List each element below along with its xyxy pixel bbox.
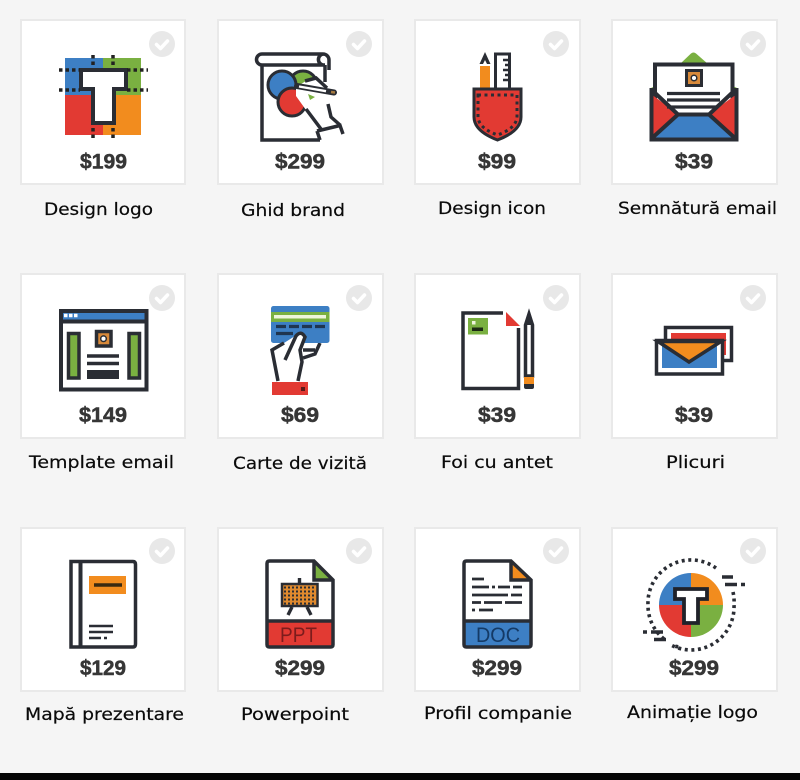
check badge [740,31,766,57]
price: $39 [675,150,713,174]
check badge [346,285,372,311]
check badge [346,538,372,564]
price: $99 [478,150,516,174]
panel: Mapă prezentare [21,528,185,725]
icon: envelopes [656,328,732,374]
panel: Plicuri [612,274,777,473]
label: Design logo [44,200,153,220]
label: Template email [28,453,174,473]
icon: PPT file [267,561,333,647]
label: Plicuri [666,453,725,473]
icon: open envelope with letter [651,52,737,140]
check badge [346,31,372,57]
DOC text: DOC [476,624,520,647]
check badge [149,538,175,564]
icon: pocket with pencil and ruler [474,52,521,140]
label: Profil companie [424,704,572,724]
icon: hand holding business card [271,306,330,395]
label: Animație logo [627,703,758,723]
label: Ghid brand [241,201,345,221]
price: $129 [80,657,126,680]
price: $299 [472,657,522,680]
price: $299 [275,657,325,680]
price: $299 [669,657,719,680]
label: Carte de vizită [233,454,367,474]
label: Design icon [438,199,546,219]
check badge [543,285,569,311]
price: $149 [79,404,127,427]
icon: logo T on colour grid [59,55,148,139]
label: Foi cu antet [441,453,553,473]
panel: Carte de vizită [218,274,383,474]
check badge [740,285,766,311]
price: $39 [675,404,713,427]
check badge [543,538,569,564]
panel: Template email [21,274,185,473]
panel: Ghid brand [218,20,383,221]
check badge [740,538,766,564]
panel: Foi cu antet [415,274,580,473]
icon: email window template [61,311,146,390]
icon: animated logo [643,560,745,650]
panel: Powerpoint [218,528,383,725]
label: Semnătură email [618,199,777,219]
check badge [543,31,569,57]
label: Mapă prezentare [25,705,184,725]
price: $39 [478,404,516,427]
icon: DOC file [464,561,531,647]
panel: Animație logo [612,528,777,723]
panel: Design icon [415,20,580,219]
check badge [149,31,175,57]
panel: Profil companie [415,528,580,724]
icon: flipchart and hand [256,54,343,140]
label: Powerpoint [241,705,349,725]
panel: Semnătură email [612,20,777,219]
price: $299 [275,150,325,174]
icon: presentation folder [71,561,136,647]
check badge [149,285,175,311]
icon: letterhead and pencil [463,312,534,389]
PPT text: PPT [280,624,317,647]
price: $199 [80,150,127,174]
panel: Design logo [21,20,185,220]
price: $69 [281,404,319,427]
